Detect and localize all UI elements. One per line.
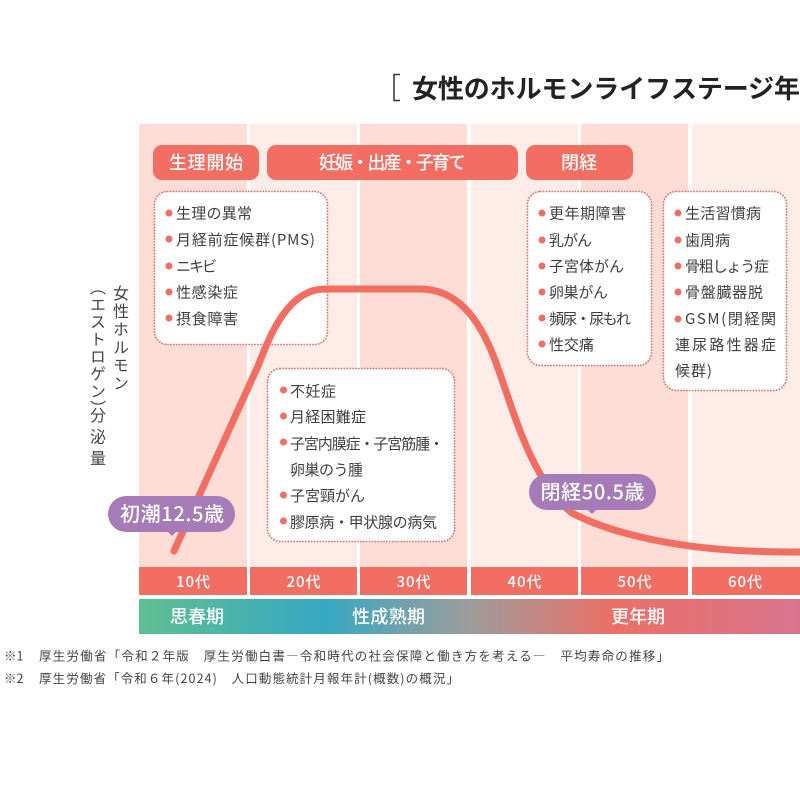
panel: conditions box 4: 生活習慣病	[685, 202, 761, 224]
age row: 60代	[728, 571, 762, 592]
panel: conditions box 1: 月経前症候群(PMS)	[176, 229, 315, 250]
footnotes: ※2	[4, 668, 24, 687]
panel: conditions box 4: GSM(閉経関	[685, 308, 776, 329]
age row: 20代	[286, 571, 320, 592]
heading: menopause stage	[526, 145, 633, 180]
panel: conditions box 3: 頻尿・尿もれ	[549, 308, 631, 329]
panel: conditions box 3: 乳がん	[549, 230, 592, 250]
footnotes	[4, 646, 669, 687]
panel: conditions box 1: 性感染症	[176, 282, 238, 302]
panel: conditions box 3: 卵巣がん	[549, 282, 608, 302]
panel: conditions box 2: 子宮内膜症・子宮筋腫・	[290, 433, 444, 454]
age row: 50代	[618, 571, 652, 592]
panel: conditions box 2: 不妊症	[290, 380, 336, 402]
panel: conditions box 3	[528, 192, 652, 366]
panel: conditions box 3: 子宮体がん	[549, 256, 624, 276]
panel: life-stage background columns	[139, 124, 800, 567]
callout: menarche age: 初潮12.5歳	[120, 498, 224, 527]
panel: conditions box 1: ニキビ	[176, 256, 217, 276]
hormone curve	[174, 289, 800, 552]
panel: conditions box 2: 卵巣のう腫	[290, 459, 363, 480]
heading: menarche stage	[153, 145, 259, 180]
panel: conditions box 3: 性交痛	[549, 334, 594, 355]
callout: menarche age	[108, 496, 235, 536]
axis label: estrogen secretion: 女性ホルモン	[109, 285, 133, 393]
callout: menopause age: 閉経50.5歳	[540, 476, 644, 505]
heading: menopause stage: 閉経	[561, 149, 597, 175]
life stage gradient bar: 更年期	[611, 603, 665, 629]
heading: menarche stage: 生理開始	[169, 149, 243, 175]
axis label: estrogen secretion: （エストロゲン）	[86, 279, 110, 417]
age row: 40代	[508, 571, 542, 592]
panel: conditions box 4: 骨粗しょう症	[685, 256, 769, 276]
panel: conditions box 2: 子宮頸がん	[290, 485, 365, 506]
age row	[139, 567, 800, 595]
footnotes: 厚生労働省「令和６年(2024) 人口動態統計月報年計(概数)の概況」	[39, 668, 459, 687]
heading: pregnancy stage	[267, 145, 518, 180]
age row: 30代	[396, 571, 430, 592]
title: 女性のホルモンライフステージ年	[412, 69, 800, 106]
callout: menopause age	[529, 474, 656, 514]
panel: conditions box 2: 膠原病・甲状腺の病気	[290, 512, 437, 532]
axis label: estrogen secretion	[86, 279, 133, 472]
footnotes: 厚生労働省「令和２年版 厚生労働白書―令和時代の社会保障と働き方を考える― 平均寿命の推移」	[39, 646, 669, 664]
age row: 10代	[176, 571, 210, 592]
panel: conditions box 4: 連尿路性器症	[675, 334, 776, 355]
panel: conditions box 2: 月経困難症	[290, 406, 366, 427]
panel: conditions box 2	[268, 368, 454, 542]
panel: conditions box 4: 骨盤臓器脱	[685, 282, 763, 302]
footnotes: ※1	[4, 646, 24, 664]
panel: conditions box 4: 候群)	[675, 360, 712, 381]
panel: conditions box 1: 生理の異常	[176, 202, 252, 224]
panel: conditions box 4: 歯周病	[685, 230, 730, 250]
axis label: estrogen secretion: 分泌量	[86, 407, 110, 472]
panel: conditions box 1: 摂食障害	[176, 308, 238, 329]
panel: conditions box 4	[664, 192, 786, 390]
life stage gradient bar: 思春期	[170, 603, 224, 629]
panel: conditions box 1	[154, 192, 328, 344]
heading: pregnancy stage: 妊娠・出産・子育て	[319, 149, 466, 175]
panel: conditions box 3: 更年期障害	[549, 202, 626, 224]
life stage gradient bar	[139, 599, 800, 634]
life stage gradient bar: 性成熟期	[352, 603, 425, 629]
